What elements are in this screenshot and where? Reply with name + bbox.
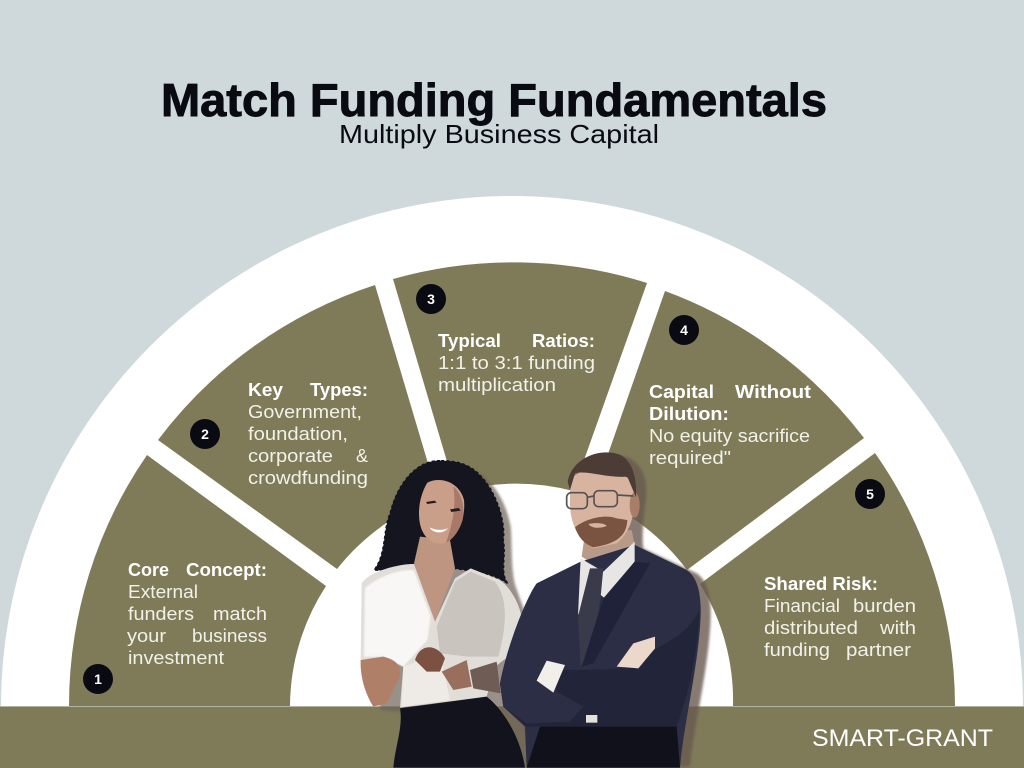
text: shared risk: Financial bbox=[764, 596, 840, 616]
text: key types: Key bbox=[248, 380, 283, 400]
text: key types: Types: bbox=[310, 380, 368, 400]
text: typical ratios: Ratios: bbox=[532, 331, 595, 351]
text: capital without dilution: Dilution: bbox=[649, 404, 729, 424]
tie bbox=[578, 568, 603, 667]
icon: number 3: 3 bbox=[427, 291, 435, 307]
text: typical ratios bbox=[438, 331, 595, 395]
face bbox=[570, 469, 634, 548]
people photo bbox=[361, 452, 711, 768]
icon: number 5 bbox=[855, 479, 885, 509]
icon: number 2 bbox=[190, 419, 220, 449]
text: capital without dilution bbox=[649, 382, 811, 468]
text: key types: Government, bbox=[248, 402, 362, 422]
title: Match Funding Fundamentals bbox=[161, 74, 827, 126]
text: capital without dilution: required" bbox=[649, 448, 731, 468]
panel: typical ratios bbox=[393, 262, 647, 492]
text: key types: crowdfunding bbox=[248, 468, 368, 488]
text: key types: & bbox=[356, 446, 368, 466]
hand bbox=[617, 637, 655, 668]
icon: number 4 bbox=[669, 315, 699, 345]
suit bbox=[500, 545, 701, 768]
smile bbox=[429, 527, 448, 532]
shirt tail bbox=[586, 715, 597, 723]
man bbox=[500, 452, 701, 768]
panel: capital without dilution bbox=[593, 291, 864, 570]
text: shared risk: Shared Risk: bbox=[764, 574, 878, 594]
icon: number 1 bbox=[83, 664, 113, 694]
hair back bbox=[374, 461, 508, 584]
white semicircle bbox=[1, 196, 1023, 707]
text: shared risk bbox=[764, 574, 916, 660]
bottom band bbox=[0, 706, 1024, 768]
text: core concept: your bbox=[127, 626, 166, 646]
subtitle: Multiply Business Capital bbox=[339, 119, 659, 149]
text: core concept: External bbox=[128, 582, 198, 602]
panel: core concept bbox=[69, 455, 326, 706]
icon: number 3 bbox=[416, 284, 446, 314]
panel: key types bbox=[158, 285, 438, 569]
woman bbox=[361, 461, 525, 768]
text: core concept: investment bbox=[128, 648, 224, 668]
shadow: woman bbox=[368, 463, 532, 767]
hair bbox=[568, 452, 636, 497]
text: shared risk: with bbox=[879, 618, 916, 638]
neck and chest bbox=[414, 537, 455, 622]
text: shared risk: funding bbox=[764, 640, 830, 660]
cuff bbox=[537, 661, 565, 693]
text: core concept: match bbox=[213, 604, 267, 624]
text: key types: foundation, bbox=[248, 424, 348, 444]
face bbox=[419, 480, 464, 544]
text: shared risk: distributed bbox=[764, 618, 858, 638]
blouse highlight bbox=[364, 570, 431, 667]
blouse lower bbox=[402, 653, 450, 707]
text: typical ratios: multiplication bbox=[438, 375, 556, 395]
text: core concept: funders bbox=[128, 604, 194, 624]
text: typical ratios: Typical bbox=[438, 331, 501, 351]
cheek shade bbox=[446, 487, 463, 543]
beard bbox=[575, 517, 627, 547]
text: key types bbox=[248, 380, 368, 488]
icon: number 5: 5 bbox=[866, 486, 874, 502]
jacket hem bbox=[527, 727, 680, 768]
icon: number 1: 1 bbox=[94, 671, 102, 687]
ear bbox=[630, 492, 640, 518]
text: core concept bbox=[127, 560, 267, 668]
text: core concept: business bbox=[192, 626, 267, 646]
panel: shared risk bbox=[700, 453, 955, 706]
icon: number 4: 4 bbox=[680, 322, 688, 338]
text: key types: corporate bbox=[248, 446, 333, 466]
shadow: man bbox=[510, 455, 711, 767]
text: capital without dilution: Capital bbox=[649, 382, 714, 402]
blouse bbox=[361, 564, 522, 708]
crossed arm bbox=[500, 610, 699, 727]
text: core concept: Core bbox=[128, 560, 169, 580]
eyes bbox=[426, 501, 461, 512]
icon: number 2: 2 bbox=[201, 426, 209, 442]
skirt bbox=[393, 697, 525, 768]
shirt bbox=[578, 542, 635, 615]
arms and hands bbox=[361, 657, 400, 707]
text: shared risk: burden bbox=[853, 596, 916, 616]
blouse shading bbox=[437, 572, 505, 657]
text: capital without dilution: No equity sacrifice bbox=[649, 426, 810, 446]
neck bbox=[582, 530, 635, 570]
text: typical ratios: 1:1 to 3:1 funding bbox=[438, 353, 595, 373]
text: core concept: Concept: bbox=[186, 560, 267, 580]
glasses bbox=[567, 491, 633, 509]
text: shared risk: partner bbox=[846, 640, 911, 660]
text: capital without dilution: Without bbox=[735, 382, 811, 402]
logo text: SMART-GRANT bbox=[812, 725, 993, 752]
lapel shadow bbox=[582, 562, 650, 667]
